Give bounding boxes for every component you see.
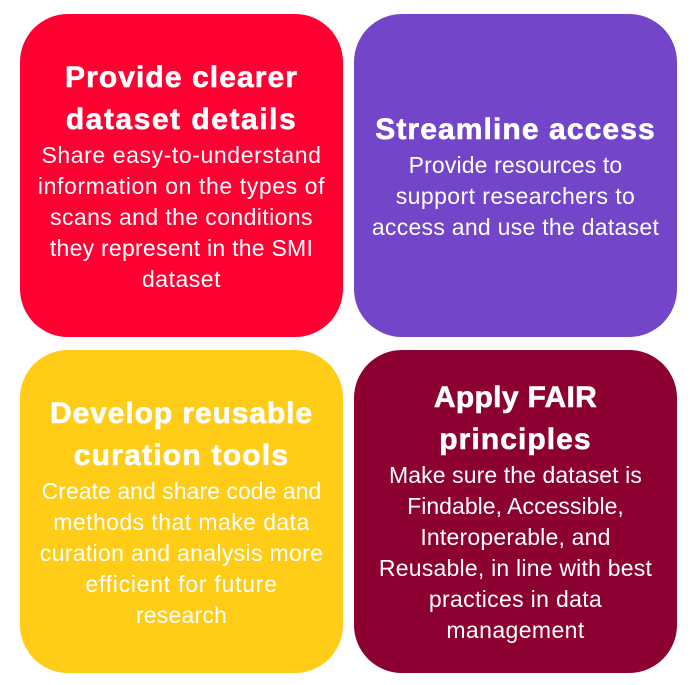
text: develop reusable curation tools body: research <box>136 602 227 628</box>
panel: streamline access <box>354 14 677 337</box>
panel: provide clearer dataset details <box>20 14 343 337</box>
text: develop reusable curation tools body: efficient for future <box>85 571 278 597</box>
text: apply FAIR principles body: practices in data <box>429 586 602 612</box>
text: apply FAIR principles body: Interoperable, and <box>420 524 611 550</box>
text: provide clearer dataset details body: they represent in the SMI <box>50 235 313 261</box>
text: provide clearer dataset details body <box>38 142 325 292</box>
panel: develop reusable curation tools <box>20 350 343 673</box>
text: apply FAIR principles body <box>379 462 652 643</box>
text: provide clearer dataset details body: scans and the conditions <box>50 204 313 230</box>
text: provide clearer dataset details body: dataset <box>142 266 221 292</box>
heading: develop reusable curation tools: Develop reusable <box>50 397 313 430</box>
text: develop reusable curation tools body: Create and share code and <box>42 478 321 504</box>
text: streamline access body: access and use the dataset <box>372 214 659 240</box>
text: provide clearer dataset details body: Share easy-to-understand <box>41 142 322 168</box>
heading: provide clearer dataset details: dataset details <box>66 103 297 136</box>
text: streamline access body <box>372 152 659 240</box>
heading: apply FAIR principles: principles <box>439 423 592 456</box>
heading: streamline access: Streamline access <box>375 113 656 146</box>
panel: apply FAIR principles <box>354 350 677 673</box>
text: apply FAIR principles body: management <box>446 617 585 643</box>
text: develop reusable curation tools body: methods that make data <box>53 509 310 535</box>
heading: develop reusable curation tools: curation tools <box>74 439 289 472</box>
text: apply FAIR principles body: Reusable, in line with best <box>379 555 652 581</box>
heading: apply FAIR principles <box>434 381 597 456</box>
text: apply FAIR principles body: Make sure the dataset is <box>389 462 642 488</box>
text: apply FAIR principles body: Findable, Accessible, <box>407 493 624 519</box>
heading: provide clearer dataset details <box>65 61 298 136</box>
text: provide clearer dataset details body: information on the types of <box>38 173 325 199</box>
text: streamline access body: Provide resources to <box>409 152 622 178</box>
heading: develop reusable curation tools <box>50 397 313 472</box>
heading: apply FAIR principles: Apply FAIR <box>434 381 597 414</box>
text: develop reusable curation tools body <box>40 478 323 628</box>
text: develop reusable curation tools body: curation and analysis more <box>40 540 323 566</box>
text: streamline access body: support researchers to <box>396 183 635 209</box>
heading: provide clearer dataset details: Provide clearer <box>65 61 298 94</box>
